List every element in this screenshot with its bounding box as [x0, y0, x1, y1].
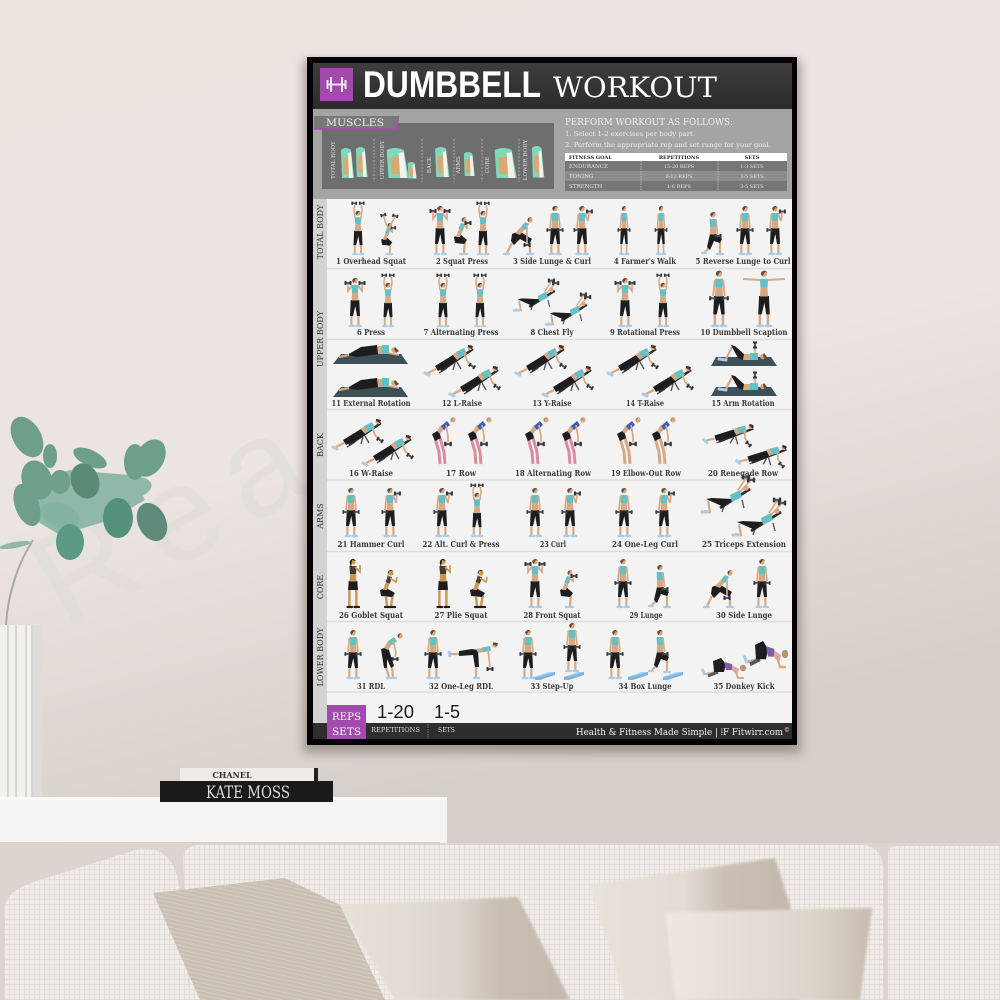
exercise 33 — [519, 623, 584, 691]
muscle group labels — [331, 139, 529, 180]
row: core — [339, 559, 772, 620]
exercise 13: 13 Y-Raise — [532, 398, 572, 408]
poster frame — [307, 57, 797, 745]
exercise 20: 20 Renegade Row — [708, 468, 779, 478]
exercise 3 — [504, 206, 593, 266]
muscle group labels: ARMS — [456, 156, 462, 175]
row labels: BACK — [316, 432, 325, 457]
exercise 3: 3 Side Lunge & Curl — [513, 256, 591, 266]
exercise 24 — [612, 488, 678, 549]
table: fitness goals: 1-3 SETS — [740, 164, 764, 170]
exercise 9 — [610, 274, 680, 337]
panel: muscles — [314, 116, 554, 189]
exercise 1 — [336, 202, 406, 266]
exercise 26: 26 Goblet Squat — [339, 610, 403, 620]
exercise 23 — [526, 488, 581, 549]
watermark on poster: ReadyMall — [5, 117, 789, 657]
exercise 15 — [711, 342, 777, 408]
muscle group labels: CORE — [485, 157, 491, 173]
table: fitness goals: REPETITIONS — [659, 155, 699, 161]
middle pillow — [340, 897, 570, 1000]
poster: framed Dumbbell Workout chart — [307, 57, 797, 745]
exercise 13 — [516, 345, 594, 408]
exercise 7 — [424, 274, 499, 337]
exercise 8 — [514, 279, 591, 337]
exercise 32 — [424, 630, 498, 691]
exercise 10: 10 Dumbbell Scaption — [700, 327, 788, 337]
exercise 2: 2 Squat Press — [436, 256, 488, 266]
table: fitness goals: 1-6 REPS — [667, 184, 691, 190]
exercise 11: 11 External Rotation — [332, 398, 411, 408]
reps and sets values: REPETITIONS — [371, 726, 420, 734]
row labels — [316, 204, 325, 686]
exercise 35 — [702, 641, 788, 691]
exercise 14 — [608, 345, 694, 408]
exercise 5 — [696, 206, 790, 266]
exercise 20 — [703, 414, 790, 478]
exercise 34 — [606, 630, 683, 691]
exercise 30: 30 Side Lunge — [716, 610, 772, 620]
sofa with pillows — [0, 843, 1000, 1000]
exercise 4: 4 Farmer's Walk — [614, 256, 676, 266]
table: fitness goals: SETS — [745, 155, 760, 161]
title: WORKOUT — [553, 71, 717, 104]
instructions heading and steps: PERFORM WORKOUT AS FOLLOWS: — [565, 118, 733, 128]
footer — [313, 702, 792, 739]
exercise 27 — [434, 559, 488, 620]
exercise 1: 1 Overhead Squat — [336, 256, 406, 266]
row: back — [333, 414, 790, 478]
muscle group labels: LOWER BODY — [523, 139, 529, 180]
plant: eucalyptus stem and leaves — [0, 411, 173, 625]
muscle illustrations — [341, 146, 544, 178]
row: upper body — [344, 271, 788, 337]
reps and sets values: 1-20 — [377, 702, 414, 722]
copyright mark: © — [784, 727, 790, 734]
muscles tab — [314, 116, 398, 129]
exercise 29 — [614, 559, 670, 620]
instructions heading and steps: 2. Perform the appropriate rep and set range for your goal. — [565, 141, 771, 149]
exercise 25: 25 Triceps Extension — [702, 539, 786, 549]
row labels: LOWER BODY — [316, 627, 325, 686]
icon: purple dumbbell badge — [320, 68, 353, 101]
row: arms — [338, 475, 786, 549]
muscles tab: MUSCLES — [326, 118, 384, 129]
instructions heading and steps: 1. Select 1-2 exercises per body part. — [565, 130, 695, 138]
title — [363, 64, 717, 105]
muscle group labels: UPPER BODY — [380, 140, 386, 179]
exercise 22 — [422, 484, 500, 549]
exercise 17 — [432, 417, 492, 478]
exercise 9: 9 Rotational Press — [610, 327, 680, 337]
exercise 23: 23 Curl — [540, 539, 566, 549]
reps and sets values — [371, 702, 460, 734]
exercise 31: 31 RDL — [357, 681, 385, 691]
info band — [313, 109, 792, 199]
left pillow — [153, 878, 385, 1000]
exercise 14: 14 T-Raise — [626, 398, 664, 408]
exercise 2 — [430, 202, 490, 266]
poster shadow — [303, 60, 801, 753]
exercise 7: 7 Alternating Press — [424, 327, 499, 337]
exercise 6 — [344, 274, 395, 337]
row labels: TOTAL BODY — [316, 204, 325, 259]
exercise 17: 17 Row — [446, 468, 477, 478]
reps and sets values: 1-5 — [434, 702, 460, 722]
table: fitness goals: 15-20 REPS — [664, 164, 695, 170]
row labels: UPPER BODY — [316, 310, 325, 367]
exercise 8: 8 Chest Fly — [530, 327, 574, 337]
exercise 19: 19 Elbow-Out Row — [611, 468, 682, 478]
exercise area background — [313, 199, 792, 723]
table: fitness goals: 6-12 REPS — [665, 174, 693, 180]
exercise 33: 33 Step-Up — [530, 681, 574, 691]
exercise 28: 28 Front Squat — [524, 610, 581, 620]
exercise 27: 27 Plie Squat — [434, 610, 488, 620]
exercise 16 — [333, 419, 414, 478]
exercise 12 — [425, 345, 501, 408]
watermark on wall: ReadyMall — [5, 117, 789, 657]
muscle group labels: TOTAL BODY — [331, 141, 337, 179]
reps and sets badge: REPS — [332, 711, 361, 723]
exercise 32: 32 One-Leg RDL — [429, 681, 493, 691]
exercise 26 — [339, 559, 403, 620]
table: fitness goals: 3-5 SETS — [740, 184, 764, 190]
exercise 21 — [338, 488, 404, 549]
exercise 10 — [700, 271, 788, 337]
front right pillow — [665, 908, 872, 1000]
exercise 31 — [344, 630, 403, 691]
exercise 11 — [332, 345, 411, 408]
muscle group labels: BACK — [427, 156, 433, 173]
tagline: Health & Fitness Made Simple | ⁞F Fitwirr.com — [576, 728, 783, 738]
reps and sets badge: SETS — [332, 726, 361, 738]
exercise 29: 29 Lunge — [630, 610, 662, 620]
reps and sets badge — [327, 705, 366, 739]
books stack — [160, 768, 333, 803]
poster header band — [313, 63, 792, 109]
exercise 15: 15 Arm Rotation — [712, 398, 775, 408]
exercise 22: 22 Alt. Curl & Press — [422, 539, 500, 549]
exercise 12: 12 L-Raise — [442, 398, 482, 408]
exercise 6: 6 Press — [357, 327, 385, 337]
table: fitness goals: 3-5 SETS — [740, 174, 764, 180]
exercise 19 — [611, 417, 682, 478]
title: DUMBBELL — [363, 64, 541, 105]
shelf — [0, 797, 447, 848]
exercise 18 — [515, 417, 592, 478]
exercise 25 — [702, 475, 786, 549]
table: fitness goals: ENDURANCE — [569, 164, 608, 170]
instructions heading and steps — [565, 118, 771, 149]
books stack: CHANEL — [212, 770, 252, 780]
exercise 30 — [704, 559, 772, 620]
exercise 21: 21 Hammer Curl — [338, 539, 404, 549]
table: fitness goals: FITNESS GOAL — [569, 155, 612, 161]
exercise 5: 5 Reverse Lunge to Curl — [696, 256, 790, 266]
table: fitness goals — [565, 153, 787, 191]
reps and sets values: SETS — [438, 726, 455, 734]
row: total body — [336, 202, 790, 266]
table: fitness goals: STRENGTH — [569, 184, 602, 190]
exercise 28 — [524, 559, 581, 620]
exercise 34: 34 Box Lunge — [618, 681, 672, 691]
exercise 16: 16 W-Raise — [349, 468, 393, 478]
exercise 35: 35 Donkey Kick — [714, 681, 775, 691]
table: fitness goals: TONING — [569, 174, 593, 180]
exercise 18: 18 Alternating Row — [515, 468, 592, 478]
exercise 24: 24 One-Leg Curl — [612, 539, 678, 549]
row: lower body — [344, 623, 788, 691]
exercise 4 — [614, 206, 676, 266]
back right pillow — [590, 858, 800, 1000]
row: upper body prone — [332, 342, 777, 408]
row labels: CORE — [316, 575, 325, 599]
row labels: ARMS — [316, 503, 325, 530]
vase: white fluted — [0, 625, 42, 801]
books stack: KATE MOSS — [206, 783, 290, 803]
